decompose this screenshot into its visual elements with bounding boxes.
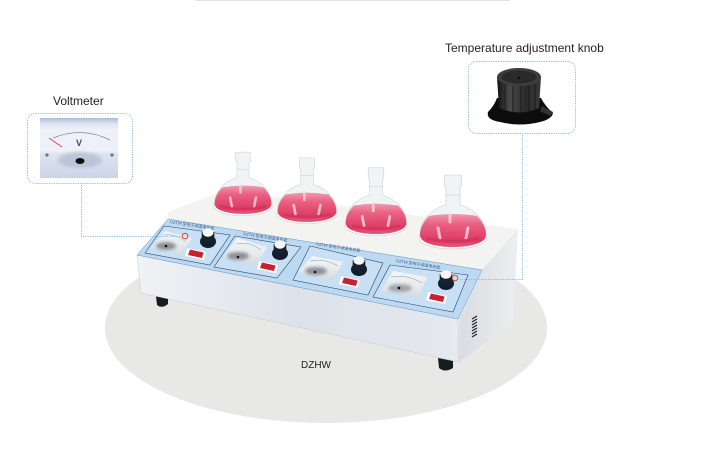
panel titles: DZTW 型电子调温电热套	[316, 240, 361, 253]
knob marker	[452, 275, 458, 281]
foot: right	[438, 358, 453, 370]
control panel	[137, 219, 482, 319]
foot: left	[156, 296, 168, 307]
voltmeter box	[28, 114, 132, 184]
flasks	[214, 152, 487, 249]
knob callout	[445, 41, 604, 134]
voltmeter marker	[182, 233, 188, 239]
panel knobs	[200, 228, 454, 290]
voltmeter heading: Voltmeter	[53, 94, 104, 108]
panel sections	[145, 226, 468, 312]
front face	[137, 255, 459, 362]
power switches	[185, 248, 447, 304]
heating mantle body	[137, 190, 518, 362]
side face	[459, 229, 518, 362]
top surface	[168, 190, 518, 270]
voltmeter callout	[28, 94, 132, 184]
knob leader line	[459, 135, 522, 280]
voltmeter leader line	[82, 185, 182, 236]
model label: DZHW	[301, 360, 332, 371]
knob image	[488, 68, 553, 124]
panel meters	[152, 231, 427, 298]
knob heading: Temperature adjustment knob	[445, 41, 604, 55]
vent slots	[472, 316, 477, 337]
panel titles: DZTW 型电子调温电热套	[396, 257, 441, 270]
panel titles: DZTW 型电子调温电热套	[170, 218, 215, 231]
knob box	[468, 62, 576, 134]
voltmeter image: V	[76, 138, 82, 148]
panel titles: DZTW 型电子调温电热套	[243, 230, 288, 243]
display ellipse	[105, 233, 547, 423]
panel titles	[170, 218, 441, 270]
